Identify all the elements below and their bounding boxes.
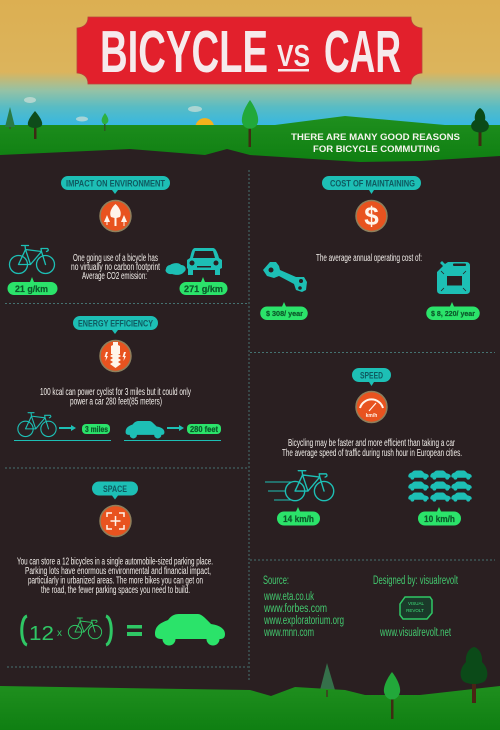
designer credit: Designed by: visualrevolt [373,575,459,587]
bottom pine trunk and tree trunk over grass [326,688,476,703]
value pill: 21 g/km: 21 g/km [15,284,48,294]
text: Average CO2 emission: [82,271,147,282]
top trees [5,100,489,147]
title banner [77,17,422,85]
source list: Source: [263,575,289,587]
text [282,438,462,459]
text: power a car 280 feet(85 meters) [70,396,162,408]
text [71,253,160,282]
text: no virtually no carbon footprint [71,262,160,273]
arrow [167,425,184,431]
value pill: 14 km/h: 14 km/h [283,514,314,525]
value pill: $ 8, 220/ year: $ 8, 220/ year [431,309,475,318]
panel: energy efficiency [14,316,221,440]
text: Parking lots have enormous environmental and financial impact, [25,566,211,577]
value pill: $ 308/ year: $ 308/ year [266,309,303,318]
text: particularly in urbanized areas. The more bikes you can get on [28,576,203,586]
equation: 12 bicycles equal one car [22,614,225,646]
source list: www.mnn.com [263,627,314,639]
icon: fast bicycle [265,471,334,501]
icon: visual revolt logo: REVOLT [406,608,424,613]
source list: www.forbes.com [263,603,327,615]
subtitle: FOR BICYCLE COMMUTING [313,144,440,154]
heading pill: SPACE [103,484,127,495]
text: You can store a 12 bicycles in a single automobile-sized parking place. [17,556,213,568]
dashed dividers [5,170,495,680]
icon: visual revolt logo [400,597,432,619]
panel: cost of maintaining [260,176,480,320]
top grass [0,116,500,162]
icon: speedometer [356,392,387,422]
bottom trees behind grass [320,647,487,703]
panel: impact on environment [8,176,228,295]
clouds [24,97,202,122]
text [17,556,213,596]
icon: wrench [263,262,307,292]
icon: parking frame [100,506,131,536]
subtitle [291,132,460,154]
source list: www.eta.co.uk [263,591,314,603]
panel: speed [265,368,472,526]
value pill: 271 g/km [180,277,228,295]
panel: space [17,482,225,646]
value pill: $ 308/ year [260,302,308,320]
heading pill: COST OF MAINTAINING [330,178,415,190]
icon: bicycle [10,246,54,274]
icon: car [126,421,164,438]
heading pill [73,316,158,334]
value pill: $ 8, 220/ year [426,302,480,320]
heading pill [352,368,391,386]
equation: 12 bicycles equal one car: x [57,628,62,639]
heading pill [61,176,170,194]
subtitle: THERE ARE MANY GOOD REASONS [291,132,460,142]
icon: car front with smoke [165,248,222,275]
title text: VS [277,38,310,73]
heading pill [322,176,421,194]
value pill: 14 km/h [277,507,320,526]
icon: dollar: $ [364,201,379,231]
icon: visual revolt logo: VISUAL [408,601,424,606]
value pill: 280 feet: 280 feet [190,425,218,434]
text: the road, the fewer parking spaces you need to build. [41,585,190,596]
heading pill [92,482,138,500]
heading pill: ENERGY EFFICIENCY [78,318,153,330]
source list: www.exploratorium.org [263,615,344,627]
bottom front tree [384,672,400,719]
value pill: 10 km/h: 10 km/h [424,514,455,525]
source list [263,575,344,639]
icon: speedometer: km/h [366,413,377,419]
title text: BICYCLE [100,19,268,85]
value pill: 21 g/km [8,277,58,295]
value pill: 10 km/h [418,507,461,526]
designer credit [373,575,459,639]
panel: sources and credits [263,575,459,639]
icon: trees [100,200,131,232]
icon: spark plug [100,340,131,372]
title text: CAR [324,19,401,85]
icon: bicycle [18,413,56,437]
icon: dollar [356,200,387,232]
icon: jerry can [437,261,470,294]
text: The average annual operating cost of: [316,253,422,264]
value pill: 271 g/km: 271 g/km [184,284,223,294]
arrow [59,425,76,431]
heading pill: SPEED [360,370,383,382]
designer credit: www.visualrevolt.net [379,627,452,639]
text: One going use of a bicycle has [73,253,158,264]
sun [196,118,214,126]
equation: 12 bicycles equal one car: 12 [29,623,54,645]
value pill: 3 miles: 3 miles [85,425,108,434]
bottom grass [0,686,500,730]
icon: traffic of cars [408,470,472,502]
heading pill: IMPACT ON ENVIRONMENT [66,178,165,190]
sky [0,0,500,126]
text: 100 kcal can power cyclist for 3 miles but it could only [40,387,191,398]
text [40,387,191,408]
